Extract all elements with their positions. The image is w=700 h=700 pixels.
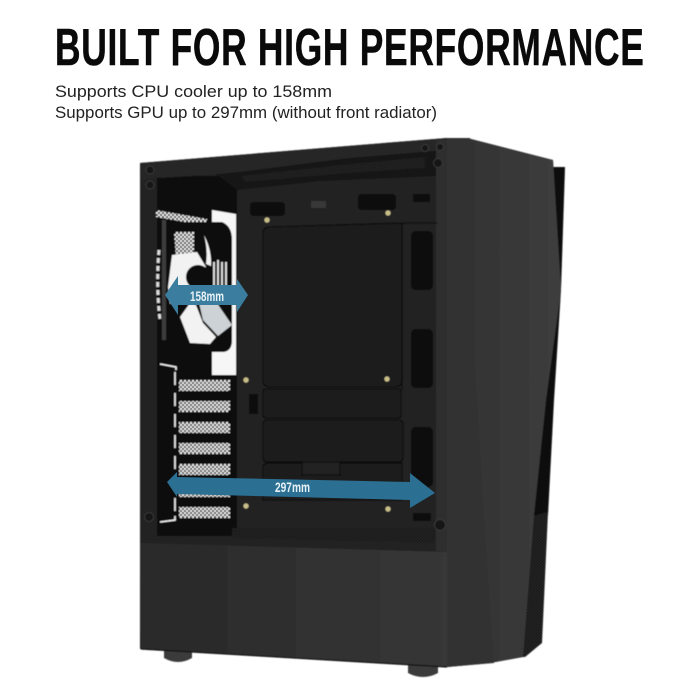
fan left ring (158, 250, 160, 320)
arrow: GPU clearance 297mm: 297mm (275, 479, 310, 495)
tray screws (243, 210, 391, 512)
fan grille stripes (214, 260, 226, 298)
PSU shroud (140, 543, 447, 667)
rear black sliver and side mesh (520, 167, 565, 657)
top mesh vent (240, 157, 425, 182)
expansion slot covers (179, 380, 230, 518)
vent area below top frame (210, 150, 440, 190)
black labels (413, 194, 431, 521)
CPU cutout (263, 223, 402, 387)
right side cable slots (249, 194, 433, 487)
bracket line right of CPU cutout (402, 223, 437, 390)
motherboard tray (237, 176, 437, 535)
arrow: CPU cooler clearance 158mm: 158mm (190, 288, 224, 304)
top frame (140, 138, 447, 180)
text block: specifications (55, 82, 437, 122)
shroud bottom edge (141, 649, 447, 667)
text block: specifications: Supports GPU up to 297mm (without front radiator) (55, 103, 437, 122)
fan hub (186, 265, 210, 289)
rear interior (157, 176, 239, 536)
PC case illustration (140, 138, 565, 677)
arrow: CPU cooler clearance 158mm (165, 276, 248, 315)
fan support bar (162, 220, 166, 340)
fan grey blade shading (196, 290, 232, 336)
tray right strip (436, 140, 447, 552)
rear fan (158, 220, 232, 352)
front panel crease (447, 138, 494, 667)
text block: specifications: Supports CPU cooler up to 158mm (55, 82, 332, 101)
bottom mesh strip (232, 528, 435, 543)
white grille above fan (156, 210, 207, 226)
case feet (164, 645, 438, 677)
arrow: GPU clearance 297mm (167, 472, 435, 508)
case body outer shape (140, 138, 561, 667)
left frame (141, 164, 157, 543)
tray cutouts (263, 223, 403, 500)
fan grille top (174, 232, 194, 262)
white opening behind fan (212, 210, 236, 375)
fan frame (158, 222, 232, 352)
front panel (447, 138, 561, 667)
thumbscrews (144, 144, 446, 530)
PCI bracket outline (160, 364, 176, 522)
fan blades (168, 235, 216, 344)
title: BUILT FOR HIGH PERFORMANCE (55, 19, 644, 77)
